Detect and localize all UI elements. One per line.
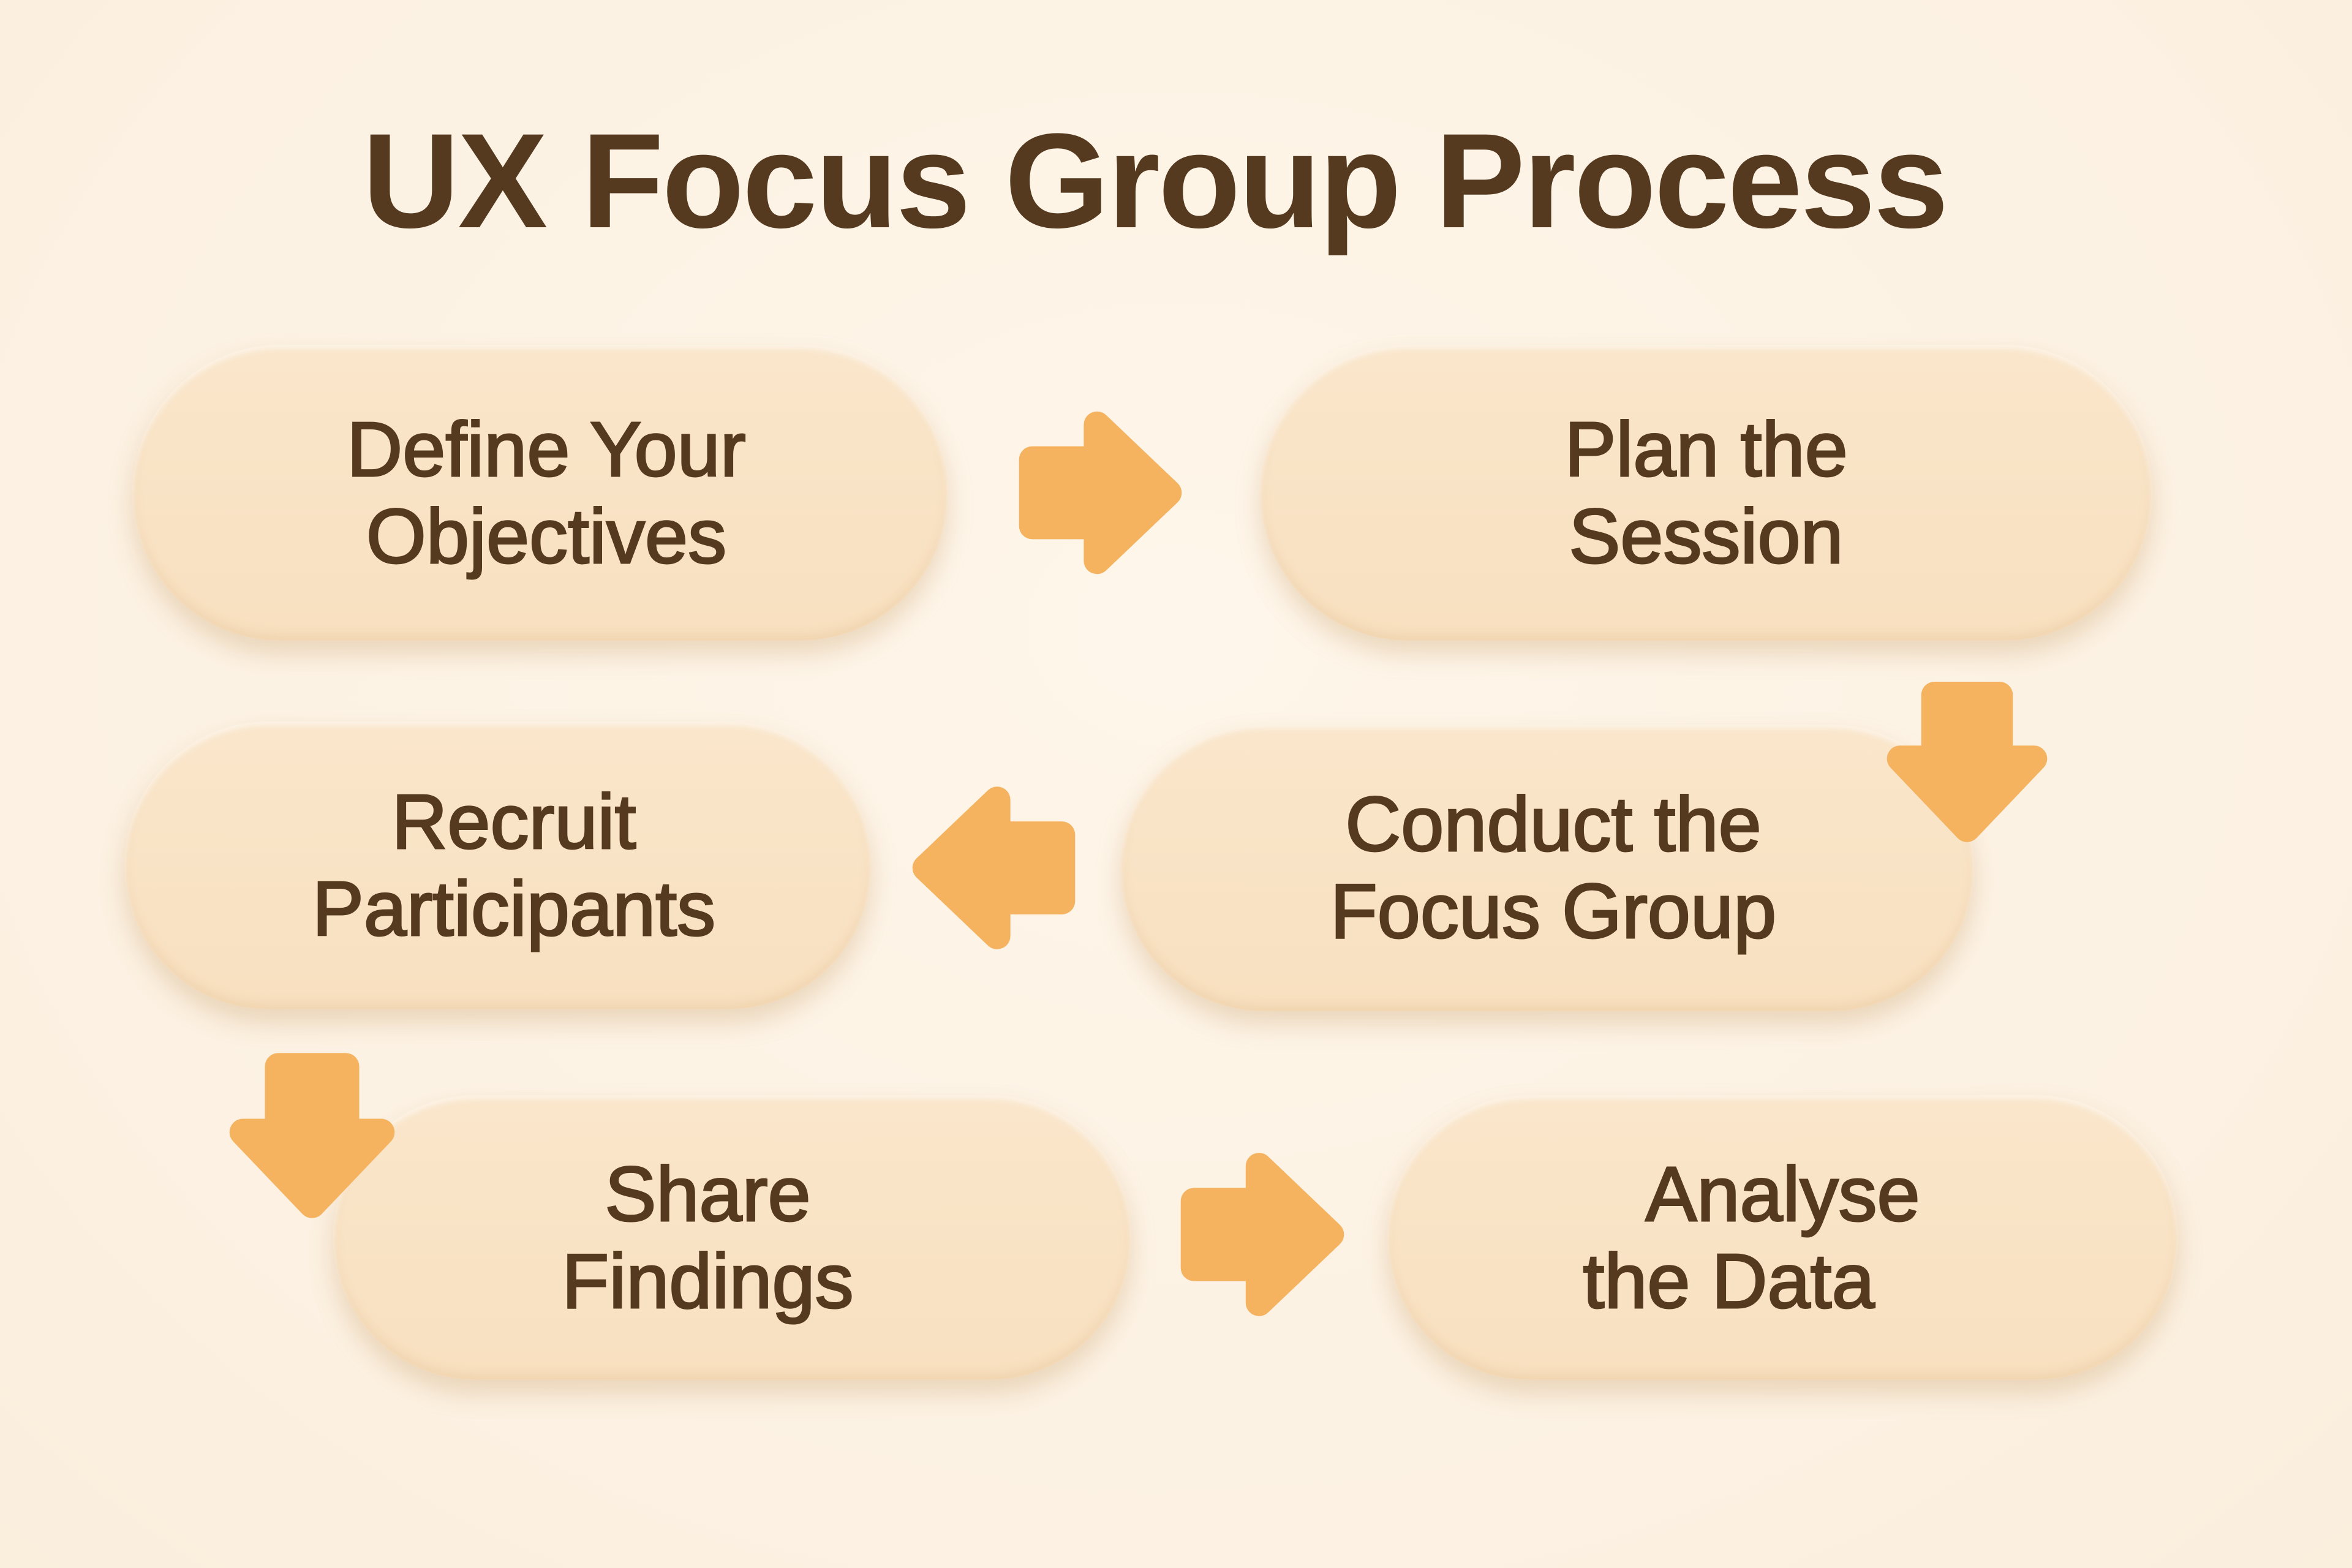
step: Conduct the Focus Group: Conduct the bbox=[1345, 781, 1762, 867]
arrow: down 2 bbox=[1887, 682, 2047, 842]
step: Plan the Session: Session bbox=[1569, 492, 1844, 579]
step: Conduct the Focus Group bbox=[1120, 725, 1974, 1011]
arrow: down 4 bbox=[229, 1053, 394, 1218]
step: Share Findings bbox=[333, 1095, 1131, 1380]
step: Recruit Participants: Recruit bbox=[391, 778, 636, 865]
step: Define Your Objectives: Objectives bbox=[366, 492, 726, 579]
step: Define Your Objectives: Define Your bbox=[347, 405, 746, 492]
step: Define Your Objectives bbox=[132, 345, 948, 641]
arrow: left 3 bbox=[913, 786, 1076, 949]
step: Share Findings: Findings bbox=[562, 1237, 854, 1324]
step: Analyse the Data: Analyse bbox=[1645, 1150, 1920, 1237]
step: Analyse the Data: the Data bbox=[1583, 1237, 1875, 1324]
step: Share Findings: Share bbox=[605, 1150, 811, 1237]
arrow: right 1 bbox=[1019, 412, 1182, 575]
step: Plan the Session bbox=[1260, 345, 2152, 641]
step: Plan the Session: Plan the bbox=[1564, 405, 1848, 492]
step: Recruit Participants: Participants bbox=[312, 865, 715, 952]
step: Analyse the Data bbox=[1387, 1095, 2178, 1380]
step: Conduct the Focus Group: Focus Group bbox=[1330, 868, 1776, 954]
step: Recruit Participants bbox=[124, 722, 872, 1009]
arrow: right 5 bbox=[1181, 1153, 1344, 1316]
title: UX Focus Group Process bbox=[363, 105, 1947, 256]
